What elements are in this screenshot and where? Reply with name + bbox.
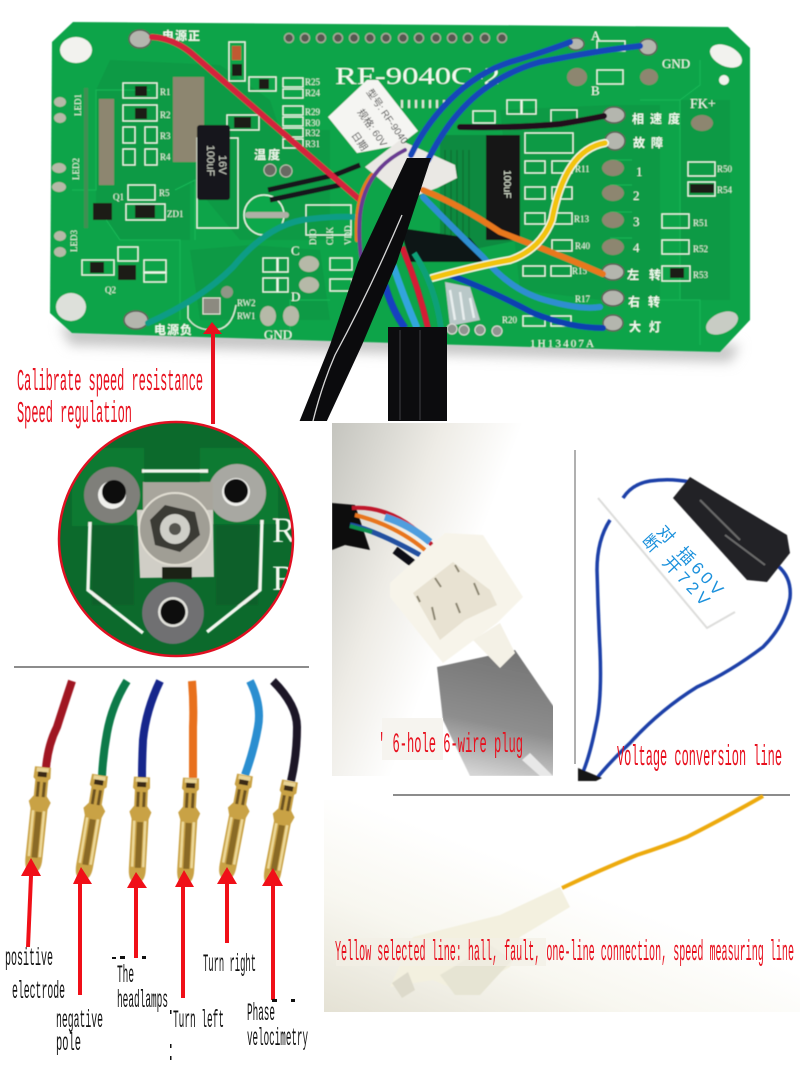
trim pot on board <box>203 298 220 314</box>
silkscreen labels: RF-9040C-2 <box>335 64 500 90</box>
silkscreen labels: D <box>291 289 300 304</box>
silkscreen labels: FK+ <box>690 97 716 112</box>
circuit board <box>50 22 750 352</box>
panel: magnified trim potentiometer <box>59 422 296 656</box>
circuit board: 型号: RF-9040 <box>364 86 411 147</box>
panel: 6-hole 6-wire plug photo <box>332 423 558 776</box>
silkscreen labels: R17 <box>575 294 591 304</box>
sticker label <box>328 80 418 153</box>
IC and capacitor area <box>440 135 520 250</box>
silkscreen labels: 1H13407A <box>530 338 594 350</box>
header pins <box>284 34 506 42</box>
text: wire function labels: Phase <box>247 999 275 1028</box>
divider: vertical <box>574 450 576 764</box>
silkscreen labels: LED1 <box>73 94 83 116</box>
text: calibrate speed resistance: Speed regulation <box>17 397 132 432</box>
silkscreen labels: R30 <box>305 118 321 128</box>
silkscreen labels: 电源负 <box>154 322 192 337</box>
silkscreen labels: Q2 <box>105 285 116 295</box>
silkscreen labels: R50 <box>717 164 733 174</box>
panel: voltage conversion line photo <box>578 477 790 781</box>
silkscreen labels: R13 <box>574 214 590 224</box>
image artifacts: cropped label remnants <box>112 956 295 1060</box>
silver solder patch <box>445 282 502 336</box>
silkscreen labels: R32 <box>305 128 320 138</box>
tag text: 断 开72V <box>638 531 714 610</box>
silkscreen labels: DIO <box>308 229 318 245</box>
silkscreen labels: 相速度 <box>632 111 680 126</box>
wires <box>46 681 297 781</box>
center shadow mass <box>400 228 490 262</box>
copper pours <box>99 68 713 255</box>
silkscreen labels: 大灯 <box>629 319 661 334</box>
silkscreen labels: C <box>291 243 300 258</box>
hole: mounting <box>56 37 746 339</box>
callout: calibrate speed resistance arrow <box>203 322 222 424</box>
silkscreen labels: R24 <box>305 88 321 98</box>
connector pins <box>22 766 301 887</box>
silkscreen labels: A <box>591 28 601 43</box>
silkscreen labels: 温度 <box>254 147 280 162</box>
silkscreen labels: 右转 <box>628 294 660 309</box>
text: wire function labels <box>5 944 308 1058</box>
circuit board: 100uF <box>204 145 216 176</box>
silkscreen labels: R40 <box>575 241 591 251</box>
red arrows <box>21 858 283 1000</box>
silkscreen labels: VDD <box>343 225 353 245</box>
silkscreen labels: 故障 <box>633 135 663 150</box>
silkscreen labels: R25 <box>305 77 321 87</box>
wires on the board <box>148 37 640 328</box>
silkscreen labels: CLK <box>325 226 335 245</box>
text: calibrate speed resistance <box>17 365 203 432</box>
silkscreen labels: R2 <box>160 110 171 120</box>
silkscreen labels: 2 <box>633 188 640 203</box>
silkscreen labels: R54 <box>717 185 733 195</box>
silkscreen labels: R53 <box>693 270 709 280</box>
divider: right <box>393 794 790 796</box>
silkscreen labels: RW2 <box>237 298 256 308</box>
silkscreen labels: GND <box>264 327 292 342</box>
circuit board: 规格: 60V <box>355 106 390 150</box>
circuit board: 100uF <box>501 170 512 198</box>
text: wire function labels: Turn right <box>203 950 256 979</box>
silkscreen labels: 左转 <box>627 267 661 282</box>
surface mount parts <box>82 41 715 326</box>
text: wire function labels: pole <box>56 1029 81 1058</box>
solder pads <box>84 467 140 523</box>
silkscreen labels: R31 <box>305 139 320 149</box>
cable and wires <box>332 503 370 550</box>
silkscreen labels: R52 <box>693 244 708 254</box>
silkscreen labels: 3 <box>633 214 640 229</box>
silkscreen labels <box>69 28 733 350</box>
tag text: 对 插60V <box>653 522 727 600</box>
silkscreen labels: R4 <box>160 152 171 162</box>
text: 6-hole 6-wire plug <box>378 718 523 761</box>
silkscreen labels: LED2 <box>71 158 81 180</box>
round capacitor footprint <box>244 195 284 235</box>
silkscreen labels: R5 <box>159 188 170 198</box>
silkscreen labels: 电源正 <box>162 28 200 43</box>
plug housing <box>408 534 523 662</box>
circuit board: 16V <box>216 155 228 175</box>
panel: magnified trim potentiometer: R <box>272 510 296 550</box>
text: Calibrate speed resistance <box>17 365 203 400</box>
circuit board: 日期 <box>349 130 370 153</box>
silkscreen labels: GND <box>662 56 690 71</box>
panel: controller circuit board photo <box>50 22 750 425</box>
gray boot <box>437 650 558 776</box>
text: wire function labels: positive <box>5 944 53 973</box>
silkscreen labels: ZD1 <box>167 209 184 219</box>
black cable sheaths <box>298 158 447 425</box>
text: wire function labels: negative <box>56 1006 103 1035</box>
silkscreen labels: R51 <box>693 218 708 228</box>
silkscreen labels: 1 <box>636 164 642 179</box>
silkscreen labels: R11 <box>575 164 590 174</box>
silkscreen labels: R15 <box>572 266 588 276</box>
silkscreen labels: R1 <box>160 87 171 97</box>
silkscreen labels: R3 <box>160 131 171 141</box>
black connector <box>673 477 790 582</box>
solder joints <box>124 30 657 331</box>
silkscreen labels: LED3 <box>69 230 79 252</box>
panel: six colored wire terminals <box>21 681 301 1000</box>
silkscreen labels: B <box>591 83 600 98</box>
silkscreen labels: RW1 <box>237 311 256 321</box>
text: velocimetry <box>247 1024 308 1053</box>
silkscreen labels: R20 <box>502 315 518 325</box>
text: wire function labels: Turn left <box>173 1006 224 1035</box>
text: wire function labels: headlamps <box>117 986 168 1015</box>
divider: left <box>14 666 309 668</box>
panel: magnified trim potentiometer: R <box>272 558 296 598</box>
wires entering sheath <box>385 247 441 328</box>
silkscreen labels: R29 <box>305 107 321 117</box>
potentiometer body <box>143 482 213 512</box>
text: wire function labels: The <box>117 961 134 990</box>
silkscreen labels: Q1 <box>113 192 124 202</box>
text: wire function labels: electrode <box>12 977 65 1006</box>
panel: yellow line connector photo <box>324 796 800 1012</box>
silkscreen labels: 4 <box>633 240 640 255</box>
capacitor <box>197 125 230 200</box>
text: ' 6-hole 6-wire plug <box>378 730 523 761</box>
